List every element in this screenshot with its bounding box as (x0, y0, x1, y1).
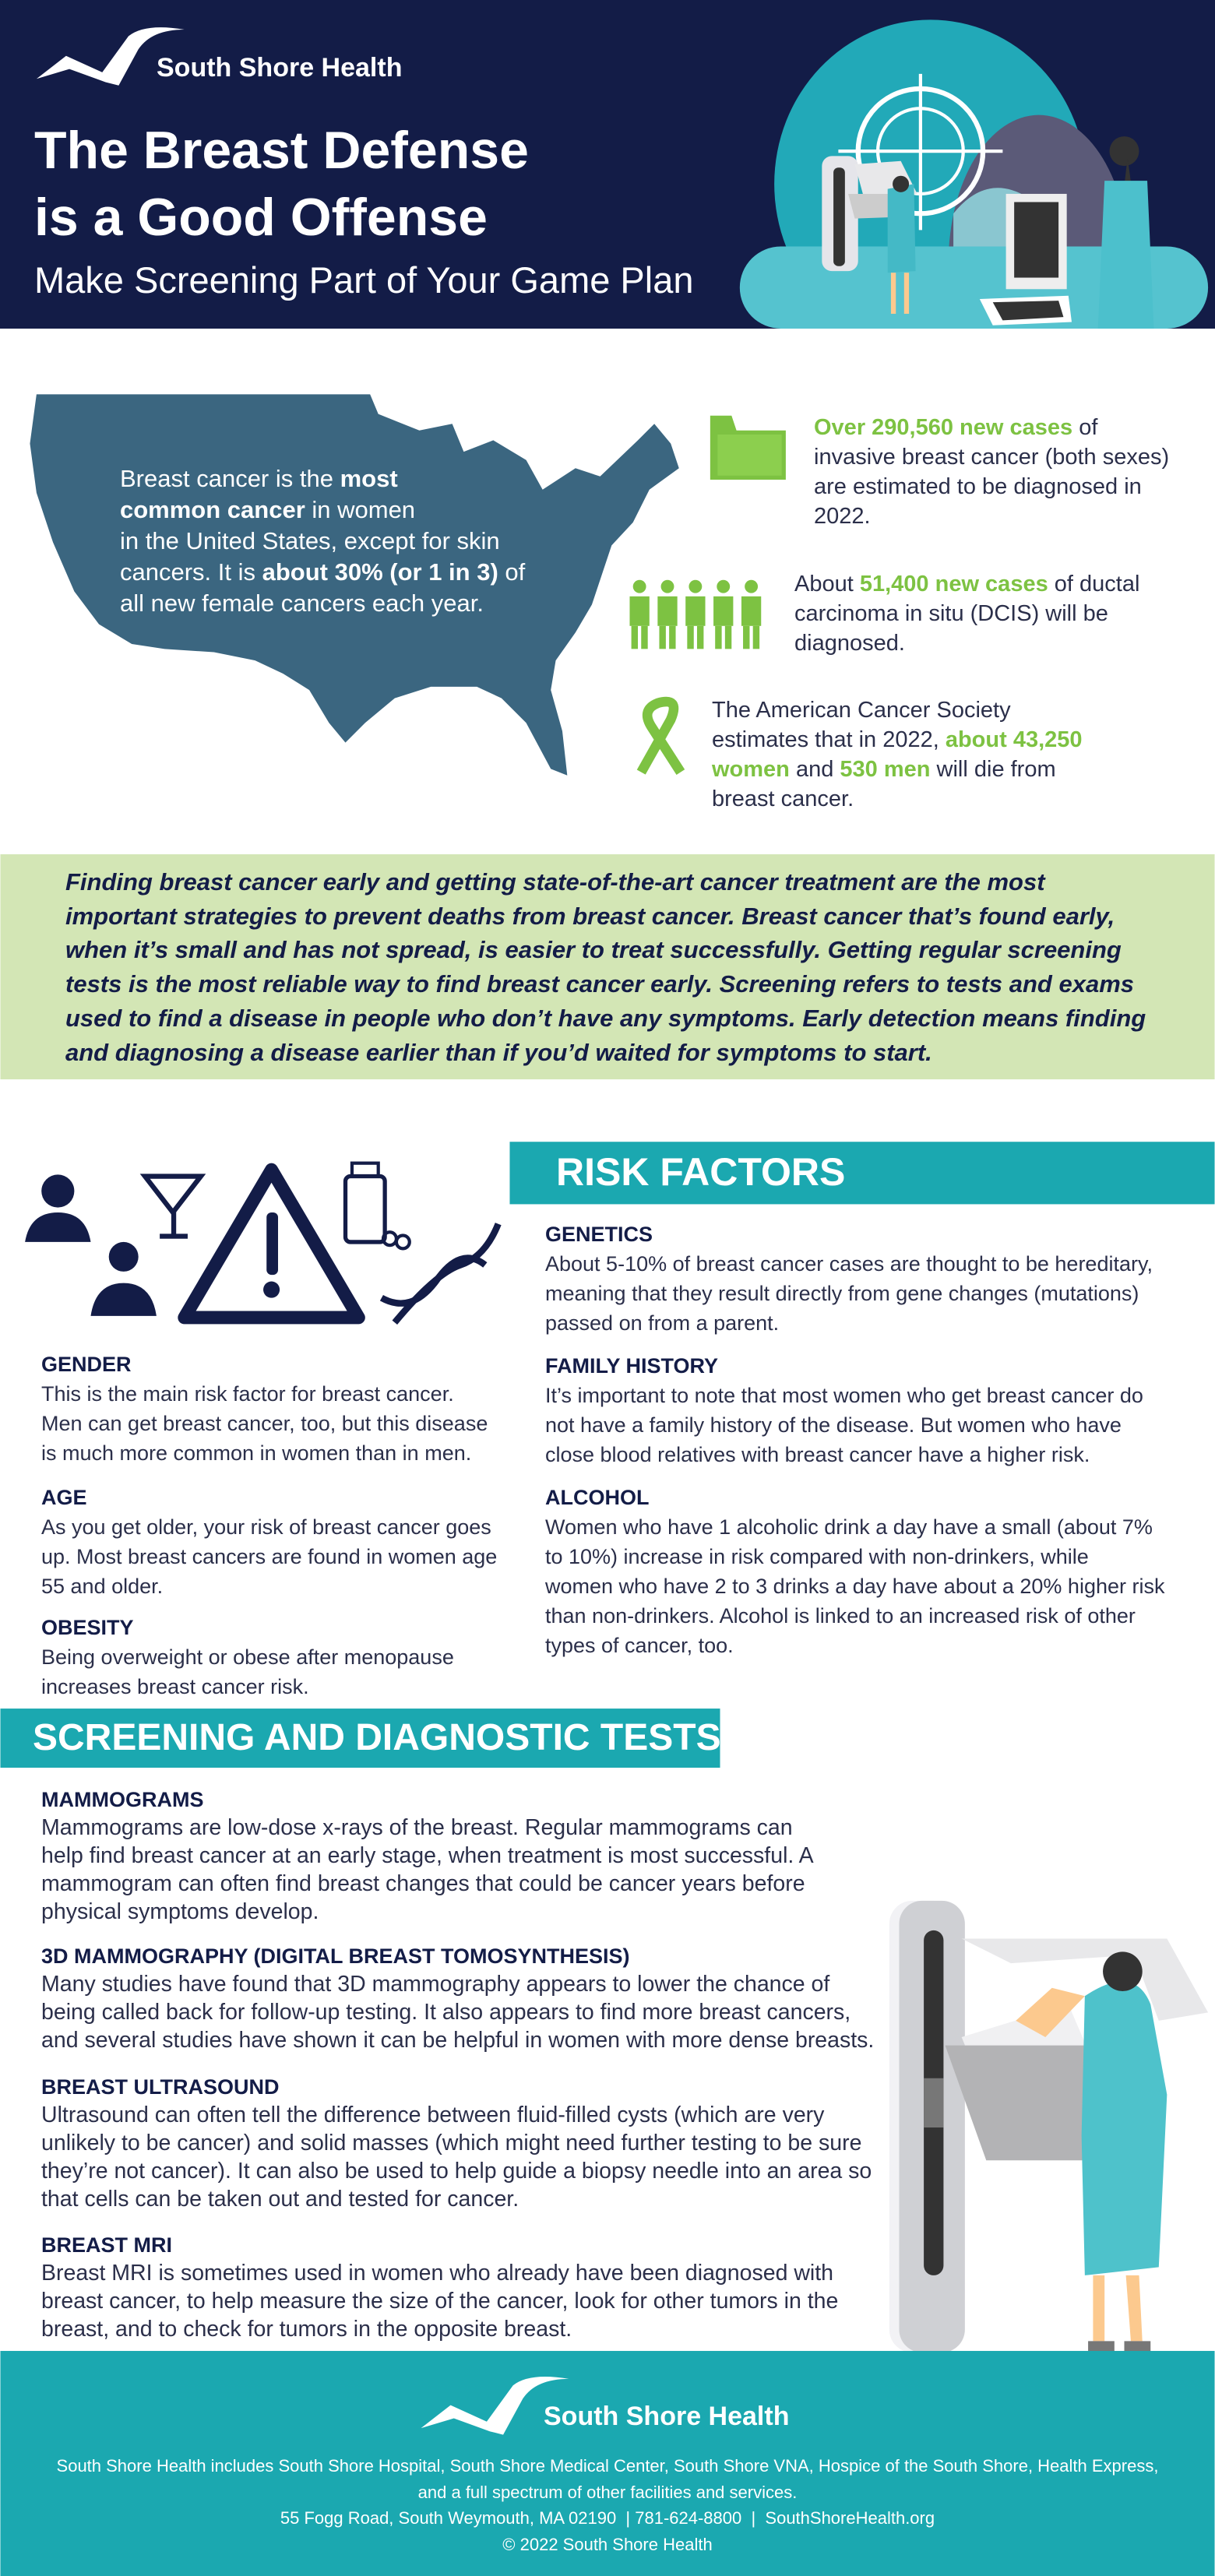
risk: genetics: passed on from a parent. (545, 1311, 779, 1335)
stat: DCIS: diagnosed. (794, 631, 905, 656)
header brand name: South Shore Health (157, 53, 402, 83)
stat: deaths (712, 698, 1083, 811)
map text: all new female cancers each year. (120, 589, 484, 617)
map text: cancers. It is about 30% (or 1 in 3) of (120, 558, 525, 586)
stat: new cases: invasive breast cancer (both sexes) (814, 445, 1169, 470)
risk: family history (545, 1354, 1143, 1466)
stat: deaths: The American Cancer Society (712, 698, 1011, 723)
stat: DCIS: About 51,400 new cases of ductal (794, 572, 1139, 596)
risk: alcohol: to 10%) increase in risk compared with non-drinkers, while (545, 1545, 1089, 1568)
title: The Breast Defense (34, 121, 529, 180)
risk: genetics: GENETICS (545, 1223, 653, 1246)
risk: alcohol: than non-drinkers. Alcohol is linked to an increased risk of other (545, 1604, 1136, 1628)
early detection text: important strategies to prevent deaths from breast cancer. Breast cancer that’s found early, (65, 903, 1115, 930)
icon: people (629, 580, 761, 649)
footer text (57, 2456, 1158, 2554)
stat: DCIS (794, 572, 1139, 656)
risk: alcohol: ALCOHOL (545, 1486, 649, 1509)
risk: family history: It’s important to note that most women who get breast cancer do (545, 1384, 1143, 1407)
test: MRI: BREAST MRI (41, 2233, 172, 2257)
risk: obesity: OBESITY (41, 1616, 134, 1639)
stat: DCIS: carcinoma in situ (DCIS) will be (794, 601, 1108, 626)
risk: obesity: increases breast cancer risk. (41, 1675, 309, 1698)
test: ultrasound: unlikely to be cancer) and solid masses (which might need further testing to be sure (41, 2131, 861, 2155)
subtitle: Make Screening Part of Your Game Plan (34, 259, 693, 301)
title: is a Good Offense (34, 188, 488, 247)
screening banner (0, 1709, 720, 1768)
test: MRI: Breast MRI is sometimes used in women who already have been diagnosed with (41, 2261, 833, 2286)
stat: deaths: breast cancer. (712, 787, 854, 811)
test: mammograms: MAMMOGRAMS (41, 1788, 203, 1811)
risk: age: AGE (41, 1486, 87, 1509)
stat: new cases: are estimated to be diagnosed in (814, 474, 1142, 499)
test: mammograms: Mammograms are low-dose x-rays of the breast. Regular mammograms can (41, 1815, 793, 1840)
icon: folder (710, 416, 786, 480)
map text: in the United States, except for skin (120, 527, 500, 554)
footer text: © 2022 South Shore Health (502, 2534, 713, 2554)
icon: footer logo (421, 2377, 569, 2435)
risk: gender: Men can get breast cancer, too, but this disease (41, 1412, 488, 1435)
test: mammograms: help find breast cancer at an early stage, when treatment is most successful. A (41, 1843, 814, 1868)
header background (0, 0, 1215, 329)
stat: new cases: Over 290,560 new cases of (814, 415, 1097, 440)
map text (120, 465, 525, 617)
risk: obesity: Being overweight or obese after menopause (41, 1645, 454, 1669)
early detection text: when it’s small and has not spread, is easier to treat successfully. Getting regular screening (65, 936, 1122, 963)
stat: new cases: 2022. (814, 504, 871, 529)
footer brand name: South Shore Health (544, 2402, 789, 2431)
risk: alcohol (545, 1486, 1165, 1657)
test: ultrasound: BREAST ULTRASOUND (41, 2075, 279, 2099)
risk: family history: close blood relatives with breast cancer have a higher risk. (545, 1443, 1090, 1466)
US map (30, 394, 679, 776)
risk: genetics: meaning that they result directly from gene changes (mutations) (545, 1282, 1139, 1305)
test: mammograms (41, 1788, 814, 1924)
test: 3D mammography: being called back for follow-up testing. It also appears to find more breast cancers, (41, 2000, 850, 2025)
risk: genetics (545, 1223, 1153, 1335)
risk: family history: not have a family history of the disease. But women who have (545, 1413, 1122, 1437)
icon: ribbon (641, 702, 681, 772)
risk icons (25, 1163, 498, 1322)
screening heading: SCREENING AND DIAGNOSTIC TESTS (33, 1717, 721, 1758)
stat: deaths: women and 530 men will die from (712, 757, 1056, 782)
risk: gender: is much more common in women than in men. (41, 1441, 471, 1465)
early detection text: tests is the most reliable way to find breast cancer early. Screening refers to tests and exams (65, 970, 1134, 998)
risk: alcohol: women who have 2 to 3 drinks a day have about a 20% higher risk (545, 1575, 1164, 1598)
stat: new cases (814, 415, 1169, 529)
risk: age: 55 and older. (41, 1575, 163, 1598)
stat: deaths: estimates that in 2022, about 43,250 (712, 727, 1083, 752)
header illustration (740, 19, 1209, 329)
map text: common cancer in women (120, 496, 415, 523)
footer text: South Shore Health includes South Shore Hospital, South Shore Medical Center, South Shore VNA, Hospice of the South Shore, Health Express, (57, 2456, 1158, 2476)
test: 3D mammography (41, 1944, 874, 2053)
green band (0, 854, 1215, 1079)
risk: family history: FAMILY HISTORY (545, 1354, 718, 1378)
risk: age: up. Most breast cancers are found in women age (41, 1545, 497, 1568)
footer band (0, 2351, 1215, 2576)
test: ultrasound: they’re not cancer). It can also be used to help guide a biopsy needle into an area so (41, 2159, 872, 2184)
risk: gender: This is the main risk factor for breast cancer. (41, 1382, 454, 1406)
test: ultrasound: Ultrasound can often tell the difference between fluid-filled cysts (which are very (41, 2103, 824, 2127)
risk: alcohol: Women who have 1 alcoholic drink a day have a small (about 7% (545, 1515, 1153, 1539)
mammography illustration (889, 1901, 1208, 2353)
footer text: and a full spectrum of other facilities and services. (418, 2483, 797, 2501)
risk: obesity (41, 1616, 454, 1698)
title (34, 121, 529, 247)
risk: alcohol: types of cancer, too. (545, 1634, 734, 1657)
early detection text: Finding breast cancer early and getting state-of-the-art cancer treatment are the most (65, 868, 1045, 896)
early detection text: used to find a disease in people who don’t have any symptoms. Early detection means finding (65, 1005, 1146, 1032)
test: MRI (41, 2233, 838, 2342)
test: mammograms: physical symptoms develop. (41, 1899, 319, 1924)
test: MRI: breast, and to check for tumors in the opposite breast. (41, 2317, 572, 2342)
test: ultrasound (41, 2075, 872, 2212)
test: 3D mammography: Many studies have found that 3D mammography appears to lower the chance of (41, 1972, 829, 1997)
risk: gender (41, 1353, 488, 1465)
risk: genetics: About 5-10% of breast cancer cases are thought to be hereditary, (545, 1252, 1153, 1276)
footer text: 55 Fogg Road, South Weymouth, MA 02190 | 781-624-8800 | SouthShoreHealth.org (280, 2508, 935, 2528)
early detection text: and diagnosing a disease earlier than if you’d waited for symptoms to start. (65, 1039, 932, 1066)
risk factors heading: RISK FACTORS (556, 1150, 845, 1194)
risk: age (41, 1486, 497, 1598)
risk: gender: GENDER (41, 1353, 132, 1376)
test: ultrasound: that cells can be taken out and tested for cancer. (41, 2187, 519, 2212)
test: 3D mammography: 3D MAMMOGRAPHY (DIGITAL BREAST TOMOSYNTHESIS) (41, 1944, 630, 1968)
icon: header logo (37, 27, 185, 86)
risk factors banner (509, 1142, 1215, 1204)
map text: Breast cancer is the most (120, 465, 398, 492)
test: 3D mammography: and several studies have shown it can be helpful in women with more dense breasts. (41, 2028, 874, 2053)
risk: age: As you get older, your risk of breast cancer goes (41, 1515, 491, 1539)
early detection text (65, 868, 1146, 1066)
test: MRI: breast cancer, to help measure the size of the cancer, look for other tumors in the (41, 2289, 838, 2314)
test: mammograms: mammogram can often find breast changes that could be cancer years before (41, 1871, 805, 1896)
